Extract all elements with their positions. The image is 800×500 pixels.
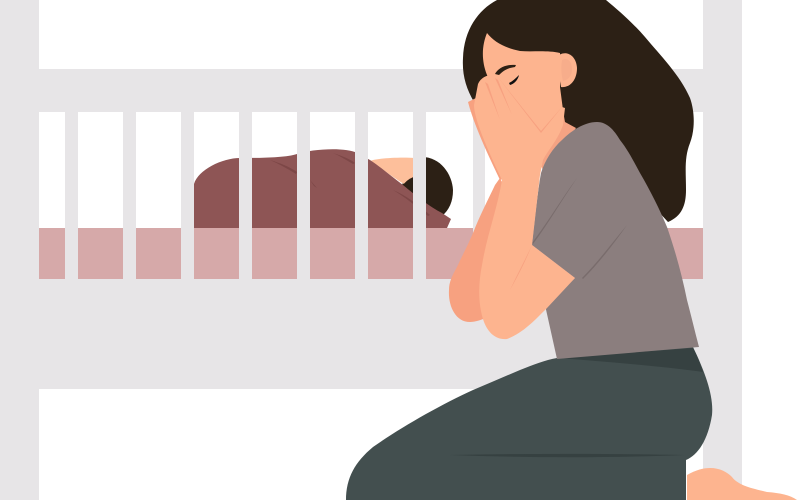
ear xyxy=(556,53,577,87)
face xyxy=(483,33,563,135)
mattress xyxy=(39,228,703,279)
trousers xyxy=(346,347,712,500)
finger lines xyxy=(485,76,562,290)
shirt xyxy=(532,122,699,359)
back arm xyxy=(449,178,510,322)
neck xyxy=(530,105,576,175)
shirt folds xyxy=(532,178,627,279)
back hand strip xyxy=(468,96,506,180)
trouser waist shadow xyxy=(558,348,703,372)
closed eye xyxy=(509,75,519,85)
foot xyxy=(687,468,797,500)
front hand and forearm xyxy=(474,75,575,339)
hair xyxy=(463,0,694,222)
eyebrow xyxy=(495,65,516,75)
baby in crib xyxy=(194,149,453,228)
trouser fold xyxy=(450,454,684,457)
mother xyxy=(346,0,797,500)
